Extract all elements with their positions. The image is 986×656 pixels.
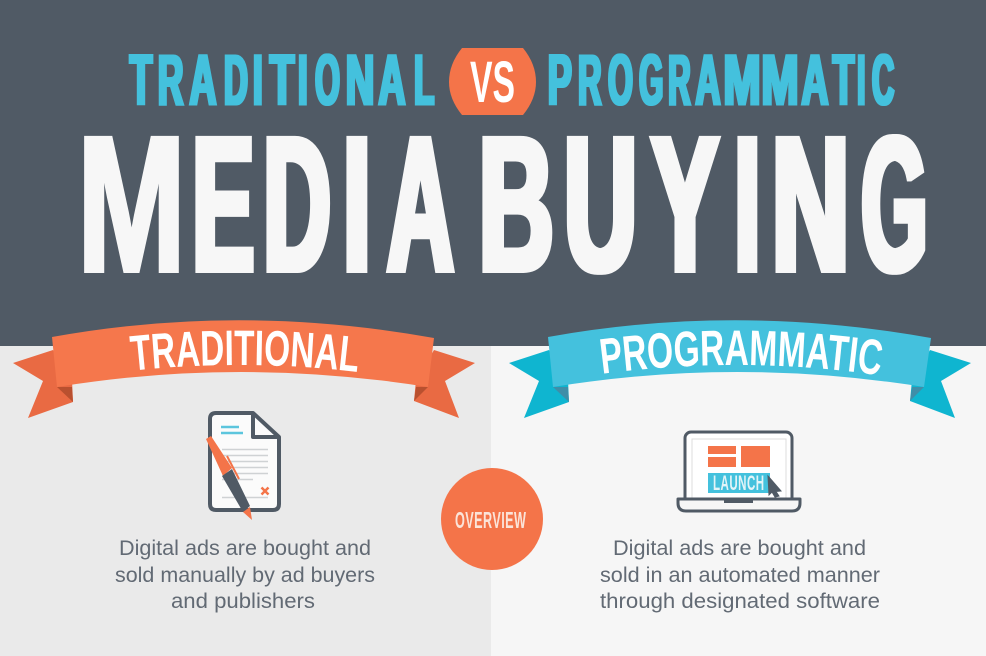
main heading: media: A xyxy=(387,97,454,311)
subtitle: programmatic: M xyxy=(761,40,799,120)
main heading: buying: Y xyxy=(651,97,719,312)
subtitle: traditional: D xyxy=(224,40,248,120)
ribbon label: PROGRAMMATIC xyxy=(600,330,882,374)
traditional description: sold manually by ad buyers xyxy=(115,564,375,587)
icon: document and pen xyxy=(206,413,279,520)
programmatic description: sold in an automated manner xyxy=(600,564,880,587)
overview badge: OVERVIEW xyxy=(455,507,526,533)
subtitle: traditional: I xyxy=(298,40,308,120)
icon: laptop with launch button: LAUNCH xyxy=(713,471,764,495)
ribbon: programmatic xyxy=(509,320,971,418)
main heading: buying: B xyxy=(479,96,554,312)
main heading: buying: U xyxy=(564,97,637,312)
subtitle: programmatic: P xyxy=(548,40,572,120)
main heading: buying: I xyxy=(731,97,764,312)
main heading: media: M xyxy=(77,96,186,311)
main heading: buying: N xyxy=(772,97,849,311)
main heading: media: D xyxy=(263,96,331,311)
header background xyxy=(0,0,986,346)
main heading: media: E xyxy=(192,97,254,311)
subtitle: programmatic xyxy=(548,40,894,121)
main heading: buying: G xyxy=(861,98,927,312)
icon: laptop with launch button xyxy=(678,432,800,511)
subtitle: programmatic: R xyxy=(578,40,601,120)
programmatic description: Digital ads are bought and xyxy=(613,537,866,560)
ribbon label: TRADITIONAL xyxy=(129,330,358,372)
traditional description: Digital ads are bought and xyxy=(119,537,371,560)
vs badge xyxy=(449,48,536,115)
programmatic description: through designated software xyxy=(600,590,880,613)
ribbon: traditional xyxy=(13,320,475,418)
subtitle: programmatic: M xyxy=(723,40,761,120)
subtitle: traditional: T xyxy=(270,42,294,120)
subtitle: traditional xyxy=(130,40,434,121)
subtitle: traditional: N xyxy=(346,42,374,121)
title xyxy=(77,40,927,312)
vs badge: VS xyxy=(470,50,515,115)
subtitle: programmatic: A xyxy=(696,40,721,120)
subtitle: programmatic: A xyxy=(802,42,828,121)
subtitle: programmatic: I xyxy=(857,42,865,120)
subtitle: programmatic: T xyxy=(833,40,854,120)
panel: traditional background xyxy=(0,346,491,656)
panel: programmatic background xyxy=(491,346,986,656)
subtitle: traditional: I xyxy=(253,40,263,120)
main heading: media: I xyxy=(340,98,374,312)
subtitle: traditional: R xyxy=(158,40,183,120)
traditional description: and publishers xyxy=(171,590,315,613)
subtitle: traditional: T xyxy=(130,40,152,120)
subtitle: programmatic: R xyxy=(668,40,691,120)
subtitle: programmatic: O xyxy=(608,40,633,120)
subtitle: traditional: O xyxy=(315,40,340,120)
subtitle: traditional: L xyxy=(414,40,434,120)
subtitle: traditional: A xyxy=(190,42,216,121)
subtitle: traditional: A xyxy=(378,42,405,121)
main heading: buying xyxy=(479,96,927,312)
subtitle: programmatic: G xyxy=(639,40,663,120)
subtitle: programmatic: C xyxy=(872,40,894,120)
overview badge xyxy=(441,468,543,570)
main heading: media xyxy=(77,96,454,312)
